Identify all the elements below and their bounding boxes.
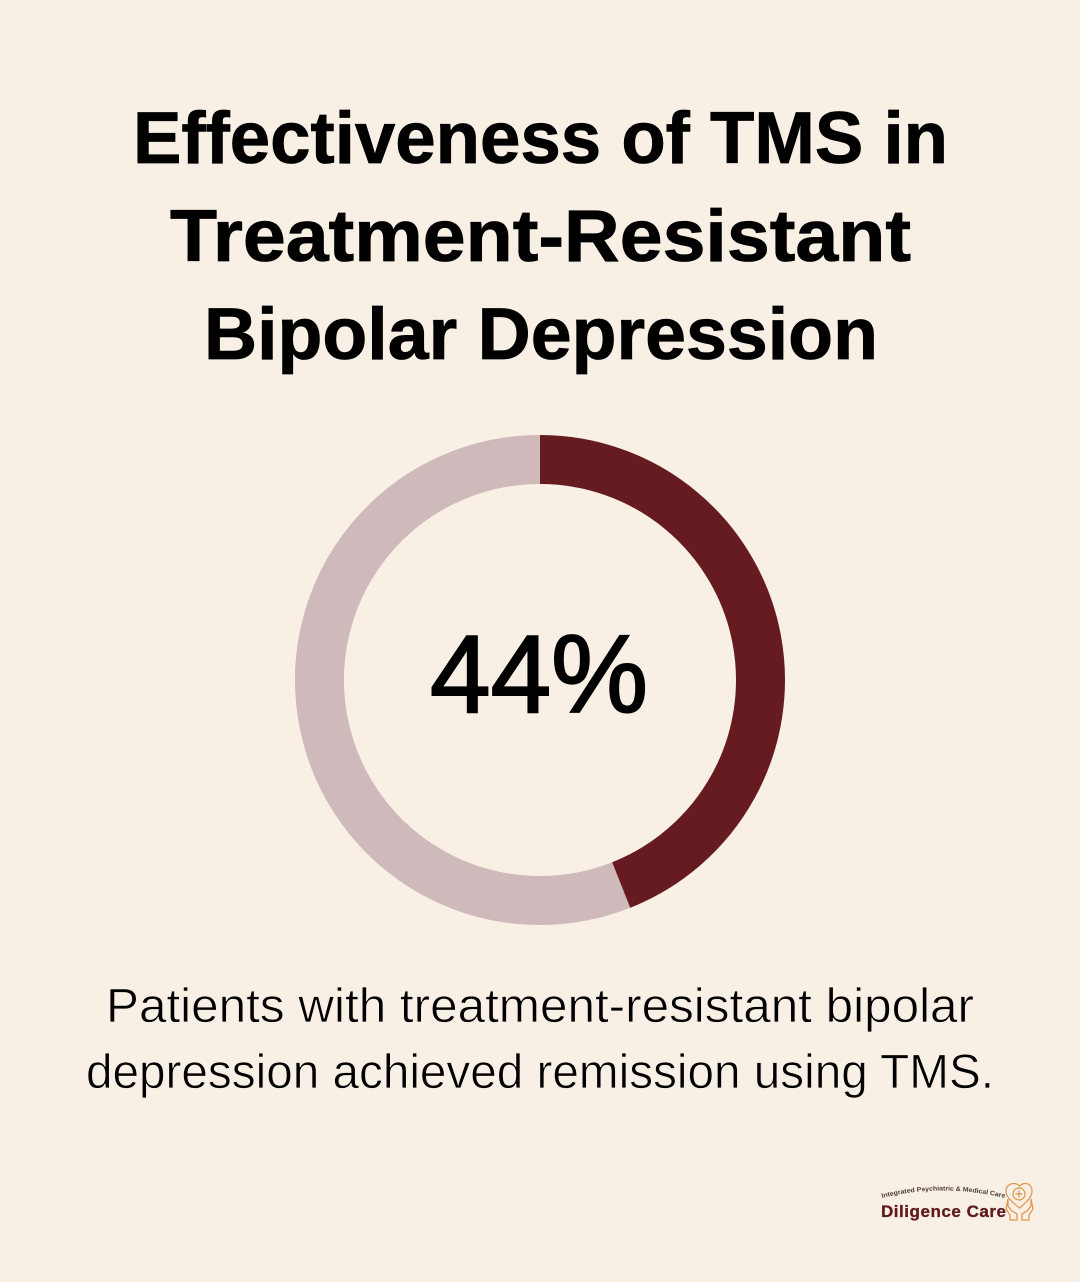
- title: Treatment-Resistant: [170, 196, 911, 277]
- percentage value: 44%: [430, 613, 648, 736]
- title: Effectiveness of TMS in: [133, 98, 948, 179]
- donut chart: 44%: [319, 460, 760, 900]
- title: [133, 98, 948, 375]
- donut highlighted segment: [540, 460, 760, 885]
- description text: [86, 980, 994, 1099]
- description text: depression achieved remission using TMS.: [86, 1046, 994, 1099]
- logo icon: heart in hands: [1006, 1184, 1033, 1220]
- description text: Patients with treatment-resistant bipolar: [106, 980, 974, 1033]
- logo wordmark: Diligence Care: [881, 1202, 1006, 1221]
- donut remainder segment: [319, 460, 621, 900]
- logo tagline: Integrated Psychiatric & Medical Care: [881, 1186, 1006, 1198]
- title: Bipolar Depression: [204, 294, 878, 375]
- logo: Diligence Care: [881, 1182, 1034, 1221]
